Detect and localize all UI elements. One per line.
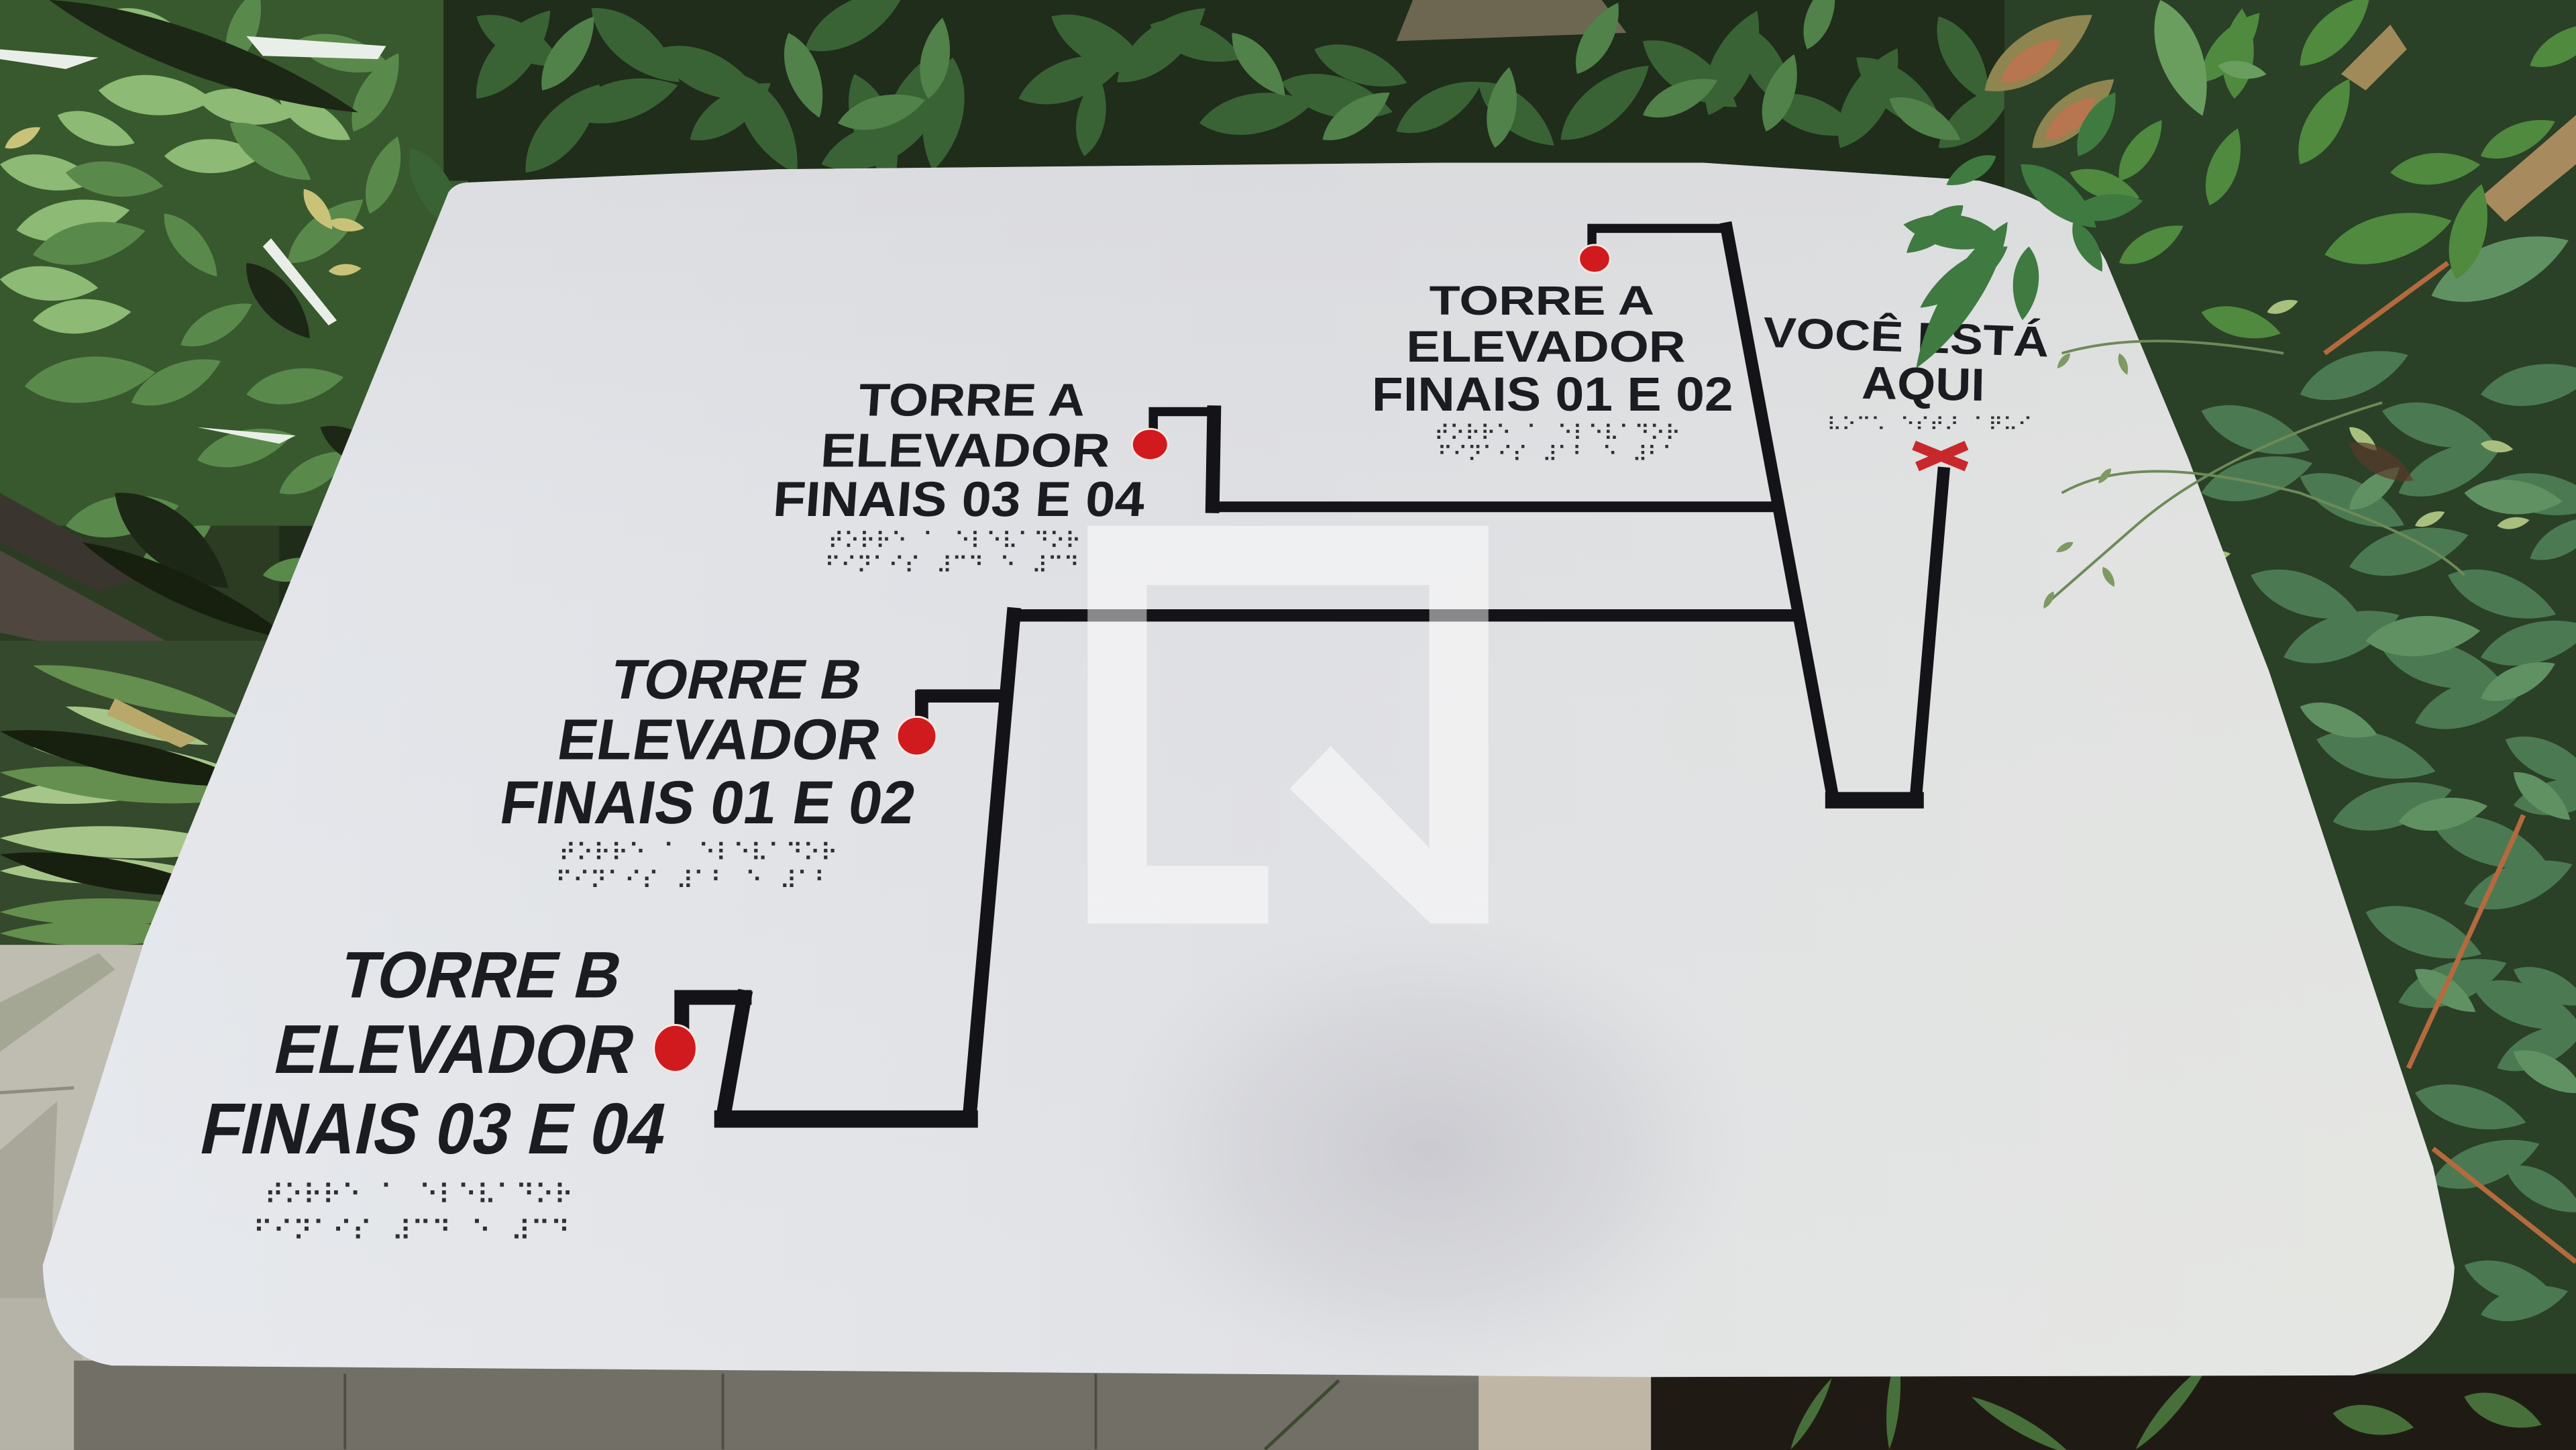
label: Torre B 03 e 04	[194, 939, 674, 1170]
icon: red X you-are-here	[1914, 446, 1966, 467]
route: from you-are-here to Torre A 01/02	[1592, 228, 1943, 800]
label: Torre A 01 e 02: ELEVADOR	[1406, 322, 1686, 372]
route: Torre B main branch	[682, 615, 1792, 1119]
label: você está aqui: VOCÊ ESTÁ	[1762, 309, 2050, 366]
label: Torre A 03 e 04: FINAIS 03 E 04	[771, 471, 1146, 527]
watermark logo	[1087, 526, 1489, 923]
foliage: left bushes	[0, 0, 468, 953]
braille: Torre B 03 e 04: ⠋⠊⠝⠁⠊⠎⠀⠼⠉⠙⠀⠑⠀⠼⠉⠙	[253, 1214, 570, 1247]
label: Torre B 03 e 04: ELEVADOR	[268, 1011, 643, 1088]
route map lines	[682, 228, 1943, 1119]
braille: Torre A 01 e 02: ⠋⠊⠝⠁⠊⠎⠀⠼⠁⠃⠀⠑⠀⠼⠃⠁	[1438, 442, 1677, 467]
label: Torre B 01 e 02: FINAIS 01 E 02	[496, 768, 920, 837]
label: Torre B 03 e 04: FINAIS 03 E 04	[194, 1088, 674, 1170]
braille: você está aqui: ⠧⠕⠉⠡⠀⠑⠎⠞⠜⠀⠁⠟⠥⠊	[1827, 415, 2032, 435]
label: Torre A 03 e 04	[771, 374, 1146, 527]
foliage: grass strip lower left	[0, 529, 297, 953]
label: Torre B 01 e 02	[496, 648, 920, 837]
label: Torre A 01 e 02	[1372, 278, 1733, 421]
soft shadow on plate	[1101, 912, 1758, 1388]
braille: Torre A 01 e 02	[1434, 420, 1680, 467]
label: você está aqui	[1762, 309, 2050, 411]
route: Torre B 01/02 branch	[922, 696, 1004, 713]
braille: Torre B 01 e 02	[555, 838, 838, 895]
label: você está aqui: AQUI	[1861, 357, 1985, 411]
label: Torre A 03 e 04: TORRE A	[857, 374, 1087, 426]
elevator markers	[654, 245, 1610, 1072]
braille: Torre B 01 e 02: ⠞⠕⠗⠗⠑⠀⠁⠀⠑⠇⠑⠧⠁⠙⠕⠗	[559, 838, 838, 867]
foliage: large top right leaves	[1972, 0, 2576, 347]
braille: Torre B 03 e 04: ⠞⠕⠗⠗⠑⠀⠁⠀⠑⠇⠑⠧⠁⠙⠕⠗	[264, 1178, 574, 1211]
foliage: leaves overlapping the plate	[1898, 86, 2464, 611]
label: Torre B 03 e 04: TORRE B	[333, 939, 630, 1012]
label: Torre B 01 e 02: TORRE B	[605, 648, 868, 711]
label: Torre A 03 e 04: ELEVADOR	[819, 425, 1112, 478]
route: Torre A 03/04 branch	[1153, 411, 1774, 507]
panel: tactile sign plate	[43, 162, 2455, 1388]
braille: Torre A 03 e 04: ⠞⠕⠗⠗⠑⠀⠁⠀⠑⠇⠑⠧⠁⠙⠕⠗	[828, 528, 1081, 555]
braille: Torre A 01 e 02: ⠞⠕⠗⠗⠑⠀⠁⠀⠑⠇⠑⠧⠁⠙⠕⠗	[1434, 420, 1680, 446]
label: Torre A 01 e 02: FINAIS 01 E 02	[1372, 368, 1733, 421]
label: Torre A 01 e 02: TORRE A	[1430, 278, 1654, 323]
ground: pavement at lower left and bottom	[0, 945, 2576, 1450]
label: Torre B 01 e 02: ELEVADOR	[553, 708, 885, 772]
foliage: top bushes	[396, 0, 2025, 242]
braille: Torre B 03 e 04	[253, 1178, 574, 1247]
foliage: right bushes	[1972, 0, 2576, 1377]
braille: Torre A 03 e 04	[824, 528, 1081, 580]
braille: Torre A 03 e 04: ⠋⠊⠝⠁⠊⠎⠀⠼⠉⠙⠀⠑⠀⠼⠉⠙	[824, 553, 1079, 580]
plate top shading	[43, 162, 2455, 1377]
braille: Torre B 01 e 02: ⠋⠊⠝⠁⠊⠎⠀⠼⠁⠃⠀⠑⠀⠼⠁⠃	[555, 866, 831, 895]
